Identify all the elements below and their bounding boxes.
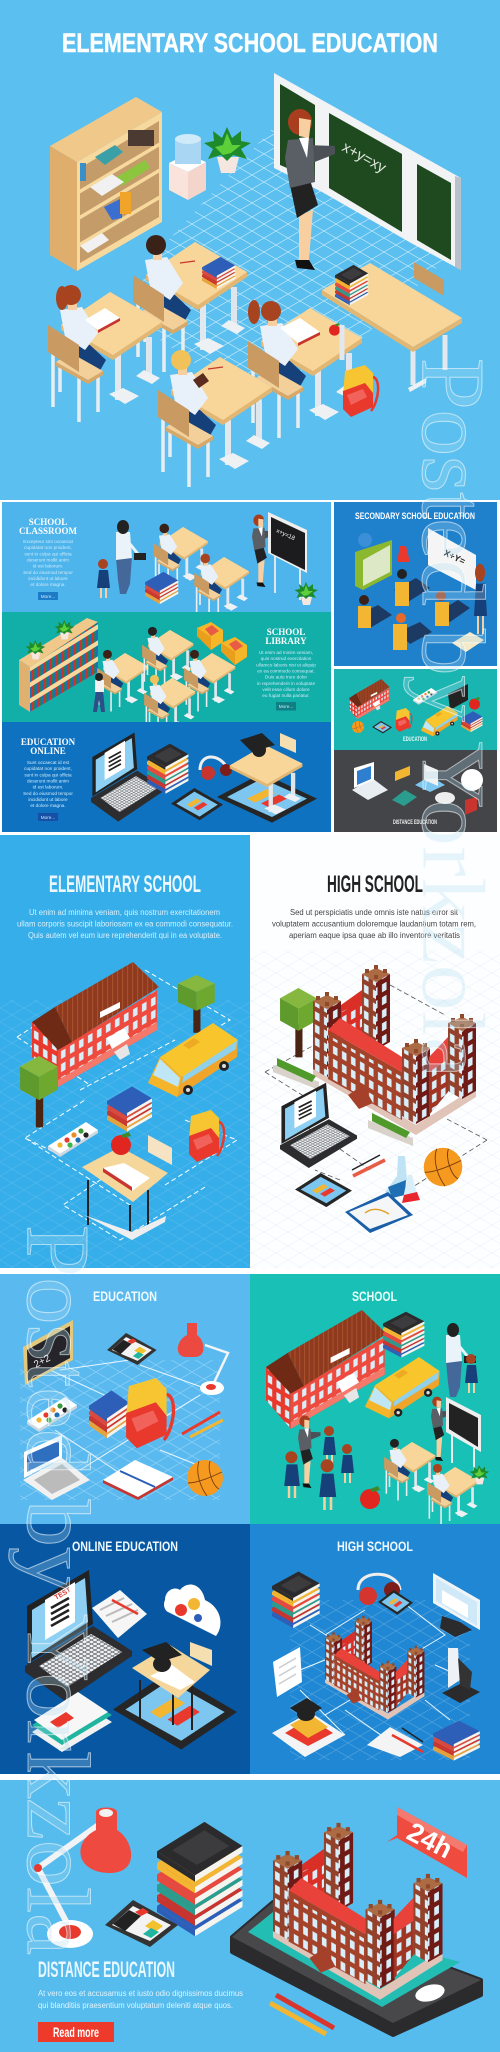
24h bubble	[387, 1807, 467, 1878]
desk	[82, 1135, 172, 1240]
ball	[352, 721, 364, 733]
palette	[27, 1397, 77, 1432]
tablet	[372, 721, 392, 733]
text block: in reprehenderit in voluptate	[257, 681, 315, 686]
heading: ONLINE EDUCATION	[72, 1538, 178, 1554]
bus	[421, 706, 458, 736]
globe	[461, 769, 483, 791]
blackboard	[268, 512, 307, 600]
backpack	[343, 365, 378, 417]
connector lines	[265, 985, 487, 1195]
text block: voluptatem accusantium doloremque laudantium totam rem,	[272, 920, 476, 928]
caption: EDUCATION	[403, 737, 427, 743]
text block: Sunt occaecat id est	[27, 760, 70, 765]
bookshelf	[50, 97, 162, 271]
tree	[20, 1056, 58, 1127]
text block: incididunt ut labore	[28, 576, 68, 581]
text block: quis nostrud exercitation	[261, 656, 312, 661]
castle	[273, 1823, 443, 2000]
blackboard: x+y=18	[275, 528, 296, 542]
board formula: x+y=xy	[339, 139, 389, 177]
water cooler	[169, 134, 206, 200]
globe	[358, 533, 372, 547]
watermark right: Posted by Yorkzola	[403, 358, 500, 1078]
plant	[294, 582, 318, 605]
text block: id est laborum.	[33, 784, 63, 790]
planter	[368, 1113, 413, 1146]
pencils	[182, 1412, 223, 1437]
headphones	[358, 1574, 400, 1605]
heading: EDUCATION	[93, 1288, 157, 1304]
clipboard	[345, 1192, 413, 1233]
basketball	[187, 1460, 223, 1496]
tree	[178, 975, 215, 1033]
text block: Sed ut perspiciatis unde omnis iste natus error sit	[290, 908, 459, 917]
desk lamp	[34, 1808, 131, 1948]
text block: ullamco laboris nisi ut aliquip	[256, 662, 316, 668]
stack of papers	[92, 1590, 147, 1638]
panel: secondary school education	[334, 502, 497, 666]
plant	[470, 1465, 489, 1484]
panel: banner school classroom	[2, 502, 331, 619]
teacher and children	[284, 1416, 354, 1510]
cloud with gears	[164, 1585, 221, 1636]
monitor	[433, 1573, 480, 1637]
text block: Quis autem vel eum iure reprehenderit qui in ea voluptate.	[28, 931, 222, 940]
desks with students	[153, 524, 249, 619]
blackboard	[446, 1397, 481, 1470]
big tablet with desk	[217, 733, 317, 823]
button: More...	[279, 704, 293, 709]
notebooks	[32, 1692, 112, 1752]
apple	[469, 697, 480, 710]
text block: et dolore magna.	[30, 803, 66, 808]
backpack	[126, 1378, 173, 1448]
heading: EDUCATION	[21, 737, 76, 747]
walking boy	[93, 673, 105, 712]
heading: SCHOOL	[267, 627, 305, 637]
armchairs	[197, 622, 247, 665]
school bus	[148, 1023, 238, 1097]
button	[38, 592, 58, 600]
book	[452, 632, 484, 652]
text block: cupidatat non proident,	[24, 766, 72, 771]
school	[349, 679, 390, 719]
teacher	[285, 109, 335, 270]
whiteboard: X+Y=	[442, 548, 467, 566]
button	[276, 702, 296, 710]
panel: distance education mini	[334, 750, 497, 832]
mother	[446, 1323, 476, 1397]
laptop	[91, 733, 164, 822]
button	[38, 2022, 114, 2042]
microscope	[442, 1648, 480, 1703]
desk lamp	[178, 1323, 228, 1395]
whiteboard	[428, 528, 476, 590]
text block: deserunt mollit anim	[27, 558, 69, 562]
cloud	[435, 792, 455, 804]
graduation cap on books	[272, 1698, 345, 1757]
plants	[26, 620, 74, 659]
apple	[360, 1486, 380, 1509]
button: Read more	[53, 2024, 99, 2040]
heading: LIBRARY	[265, 636, 307, 646]
calculator	[105, 1900, 178, 1947]
planter	[273, 1058, 319, 1090]
laptop with test	[25, 1570, 132, 1701]
chalkboard: 2+2	[32, 1353, 53, 1371]
flasks	[385, 1156, 420, 1203]
24h bubble: 24h	[402, 1817, 457, 1864]
text block: ex ea commodo consequat.	[257, 668, 315, 674]
tablet and desk	[113, 1642, 237, 1750]
text block: et dolore magna.	[30, 582, 66, 587]
text block: Sed do eiusmod tempor	[23, 791, 73, 796]
tree	[280, 988, 317, 1057]
caption: DISTANCE EDUCATION	[393, 820, 437, 826]
text block: Excepteur sint occaecat	[23, 539, 74, 544]
tablet	[295, 1173, 352, 1207]
heading: CLASSROOM	[19, 526, 78, 536]
apple	[111, 1132, 131, 1155]
panel: banner school library	[2, 612, 331, 736]
text block: qui blanditiis praesentium voluptatum deleniti atque quos.	[38, 2001, 233, 2010]
books	[147, 744, 188, 794]
text block: ullam corporis suscipit laboriosam ex ea commodi consequatur.	[17, 920, 233, 928]
castle	[325, 1616, 424, 1719]
tablet	[378, 1590, 413, 1615]
watermark left: Posted by Yorkzola	[8, 1225, 107, 1955]
heading: SCHOOL	[29, 517, 67, 527]
shelves	[19, 618, 98, 712]
text block: At vero eos et accusamus et iusto odio dignissimos ducimus	[38, 1989, 243, 1998]
palette	[413, 688, 437, 705]
small tablet	[171, 788, 223, 820]
desks	[384, 1439, 478, 1526]
board	[448, 684, 468, 710]
paper	[273, 1647, 302, 1697]
text block: aperiam eaque ipsa quae ab illo inventore veritatis	[289, 931, 460, 940]
books	[433, 1721, 480, 1761]
panel: distance education	[0, 1780, 500, 2052]
text block: Sed do eiusmod tempor	[23, 570, 73, 575]
button	[38, 813, 58, 821]
desks	[97, 627, 235, 736]
students	[358, 569, 470, 650]
books	[89, 1390, 130, 1438]
flask	[397, 546, 410, 562]
mother	[116, 520, 146, 594]
panel: elementary classroom	[0, 0, 500, 500]
laptop 2	[415, 764, 445, 792]
books	[145, 572, 178, 604]
text block: Ut enim ad minim veniam,	[259, 650, 313, 655]
backpack	[189, 1110, 224, 1162]
connector lines	[17, 970, 237, 1240]
heading: HIGH SCHOOL	[327, 871, 423, 898]
text block: velit esse cillum dolore	[262, 687, 310, 692]
child	[97, 559, 110, 598]
text block	[38, 1989, 243, 2010]
headphones	[200, 757, 232, 780]
text block: eu fugiat nulla pariatur.	[262, 693, 310, 698]
heading: SCHOOL	[352, 1288, 397, 1304]
heading: HIGH SCHOOL	[337, 1538, 413, 1554]
folder	[395, 766, 410, 781]
books	[272, 1571, 320, 1628]
books	[383, 1312, 424, 1358]
book	[392, 790, 417, 806]
text block: sunt in culpa qui officia	[24, 772, 72, 778]
teacher	[474, 564, 487, 634]
panel: high school	[250, 835, 500, 1268]
badge	[465, 797, 477, 815]
paper and pen	[367, 1727, 423, 1757]
teacher	[431, 1397, 451, 1461]
watercolour palette	[48, 1122, 98, 1157]
heading: ELEMENTARY SCHOOL	[49, 871, 201, 898]
panel: education	[0, 1274, 250, 1524]
panel: online education	[0, 1524, 250, 1774]
school building	[266, 1310, 387, 1429]
smartphone	[232, 1902, 481, 2035]
panel: high school mini	[250, 1524, 500, 1774]
teacher	[252, 515, 274, 587]
student desks	[48, 235, 362, 487]
heading: ONLINE	[30, 746, 66, 756]
backpack	[396, 708, 412, 732]
text block: id est laborum.	[33, 564, 63, 568]
text block: incididunt ut labore	[28, 797, 68, 802]
text block: Ut enim ad minima veniam, quis nostrum exercitationem	[29, 908, 220, 917]
basketball	[424, 1148, 462, 1186]
castle	[313, 965, 476, 1135]
child	[465, 1354, 478, 1393]
panel: banner education online	[2, 722, 331, 832]
panel: school	[250, 1274, 500, 1526]
books	[157, 1822, 242, 1936]
books	[107, 1086, 152, 1132]
teacher desk	[322, 262, 462, 392]
pens	[270, 1995, 334, 2034]
text block: sunt in culpa qui officia	[24, 552, 72, 556]
text block: Duis aute irure dolor	[265, 674, 308, 680]
panel: elementary school	[0, 835, 250, 1268]
pencils	[352, 1155, 385, 1176]
bus	[365, 1357, 440, 1418]
laptop	[23, 1435, 90, 1500]
text block: deserunt mollit anim	[27, 778, 69, 784]
calculator	[107, 1333, 157, 1365]
school building	[32, 962, 159, 1087]
text block	[17, 908, 233, 940]
books	[461, 711, 483, 732]
laptop with test: TEST	[54, 1586, 73, 1602]
button: More...	[41, 594, 55, 599]
chalkboard	[23, 1320, 73, 1385]
panel: education mini	[334, 669, 497, 750]
heading: DISTANCE EDUCATION	[38, 1957, 175, 1982]
laptop	[352, 762, 388, 800]
chalkboards	[274, 73, 461, 270]
button: More...	[41, 815, 55, 820]
laptop	[280, 1083, 357, 1168]
plant	[204, 127, 251, 173]
book stack on desk	[335, 265, 368, 305]
open book	[103, 1460, 173, 1500]
text block	[272, 908, 476, 940]
green shelf	[355, 540, 392, 590]
text block: cupidatat non proident,	[24, 545, 72, 550]
